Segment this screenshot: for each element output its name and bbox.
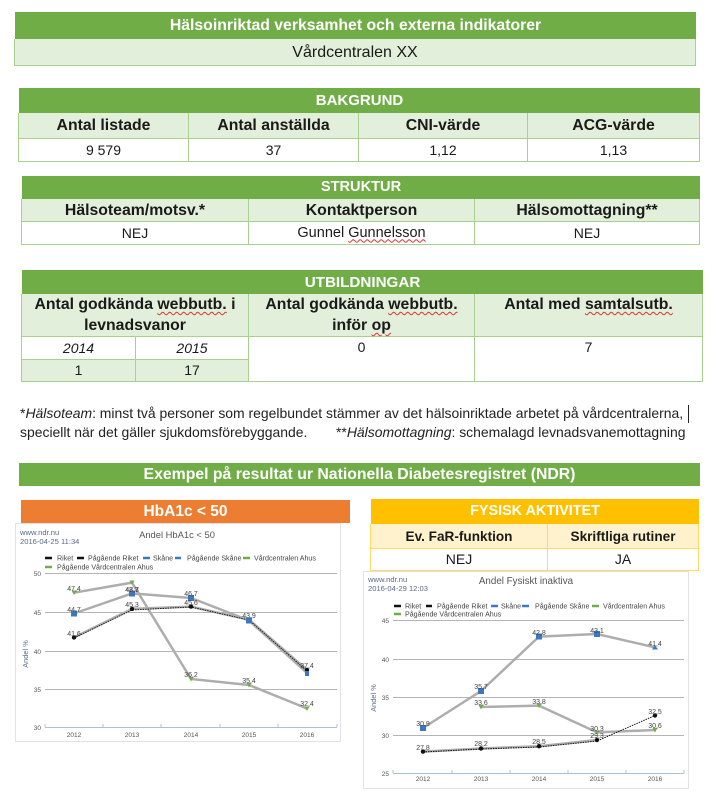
line chart: Andel HbA1c < 50: Vårdcentralen Ahus <box>254 554 316 562</box>
value: skriftliga rutiner <box>548 549 699 571</box>
line chart: Andel HbA1c < 50: 43,9 <box>242 613 256 620</box>
line chart: Andel Fysiskt inaktiva: 2012 <box>416 776 431 783</box>
heading: utbildningar <box>22 270 703 294</box>
line chart: Andel HbA1c < 50: Andel % <box>21 640 30 668</box>
heading: fysisk aktivitet <box>371 499 699 524</box>
line chart: Andel Fysiskt inaktiva: Vårdcentralen Ahus <box>603 602 665 610</box>
line chart: Andel Fysiskt inaktiva: Pågående Riket <box>437 602 488 610</box>
line chart: Andel HbA1c < 50: 2012 <box>67 732 82 739</box>
column header: kontaktperson <box>249 199 475 222</box>
column header: hälsomottagning: Hälsomottagning** <box>516 202 658 218</box>
value: hälsomottagning: NEJ <box>574 224 600 240</box>
value: ACG-värde <box>528 139 700 162</box>
value: hälsomottagning <box>475 222 700 245</box>
value: FaR-funktion <box>371 549 548 571</box>
line chart: Andel HbA1c < 50: 35 <box>34 687 41 694</box>
column header: ACG-värde <box>528 113 700 139</box>
line chart: Andel Fysiskt inaktiva: 45 <box>382 618 389 625</box>
panel: bakgrund <box>18 88 700 162</box>
heading: HbA1c: HbA1c < 50 <box>143 503 228 520</box>
line chart: Andel Fysiskt inaktiva: 30,9 <box>416 721 430 728</box>
column header: antal listade: Antal listade <box>57 117 150 134</box>
value: antal listade <box>19 139 189 162</box>
line chart: Andel Fysiskt inaktiva: 28,2 <box>474 741 488 748</box>
line chart: Andel HbA1c < 50: 50 <box>34 571 41 578</box>
value: skriftliga rutiner: JA <box>615 551 631 567</box>
column header: samtalsutb <box>475 294 703 337</box>
line chart: Andel HbA1c < 50: 30 <box>34 725 41 732</box>
line chart: Andel HbA1c < 50: Pågående Vårdcentralen Ahus <box>57 564 154 572</box>
line chart: Andel Fysiskt inaktiva: 2016 <box>648 776 663 783</box>
line chart: Andel Fysiskt inaktiva: 2016-04-29 12:03 <box>368 584 428 593</box>
line chart: Andel Fysiskt inaktiva: 40 <box>382 657 389 664</box>
section heading: NDR: Exempel på resultat ur Nationella Diabetesregistret (NDR) <box>144 466 575 483</box>
column header: samtalsutb: Antal med samtalsutb. <box>504 296 673 313</box>
value: hälsoteam <box>22 222 249 245</box>
value: kontaktperson: Gunnel Gunnelsson <box>297 224 426 240</box>
heading: struktur <box>22 176 700 199</box>
line chart: Andel HbA1c < 50: 48,7 <box>125 587 139 594</box>
value: webbutb inför op <box>249 337 475 382</box>
line chart: Andel HbA1c < 50: 2015 <box>242 732 257 739</box>
line chart: Andel Fysiskt inaktiva: Pågående Vårdcentralen Ahus <box>405 610 502 618</box>
value: antal anställda <box>189 139 359 162</box>
value: samtalsutb <box>475 337 703 382</box>
column header: skriftliga rutiner <box>548 524 699 549</box>
line chart: Andel HbA1c < 50: 2014 <box>184 732 199 739</box>
value: kontaktperson <box>249 222 475 245</box>
line chart: Andel HbA1c < 50: 2016-04-25 11:34 <box>20 537 79 546</box>
line chart: Andel Fysiskt inaktiva: 28,5 <box>532 739 546 746</box>
heading: fysisk aktivitet: FYSISK AKTIVITET <box>470 503 600 519</box>
line chart: Andel HbA1c < 50: 36,2 <box>184 672 198 679</box>
line chart: Andel Fysiskt inaktiva: 32,5 <box>648 709 662 716</box>
value: hälsoteam: NEJ <box>122 224 148 240</box>
column header: FaR-funktion <box>371 524 548 549</box>
line chart: Andel Fysiskt inaktiva: 35,7 <box>474 684 488 691</box>
line chart: Andel HbA1c < 50: 40 <box>34 649 41 656</box>
line chart: Andel HbA1c < 50: Pågående Riket <box>88 554 139 562</box>
line chart: Andel HbA1c < 50: 41,6 <box>67 631 81 638</box>
year: 2015: 2015 <box>176 340 208 356</box>
column header: antal listade <box>19 113 189 139</box>
column header: hälsoteam <box>22 199 249 222</box>
line chart: Andel HbA1c < 50: 47,3 <box>125 587 139 594</box>
line chart: Andel HbA1c < 50: 45,6 <box>184 600 198 607</box>
year: 2014 <box>22 337 136 360</box>
column header: skriftliga rutiner: Skriftliga rutiner <box>570 528 676 544</box>
line chart: Andel Fysiskt inaktiva: Andel Fysiskt inaktiva <box>479 576 574 587</box>
value: ACG-värde: 1,13 <box>600 142 627 158</box>
column header: webbutb inför op: Antal godkända webbutb. <box>265 296 458 313</box>
title bar <box>15 12 696 39</box>
line chart: Andel Fysiskt inaktiva: 33,6 <box>474 700 488 707</box>
column header: webbutb inför op <box>249 294 475 337</box>
line chart: Andel Fysiskt inaktiva: 30 <box>382 733 389 740</box>
value: CNI-värde: 1,12 <box>429 142 457 158</box>
heading: utbildningar: UTBILDNINGAR <box>305 274 420 290</box>
subtitle: health centre name: Vårdcentralen XX <box>292 44 418 60</box>
line chart: Andel HbA1c < 50: 46,7 <box>184 591 198 598</box>
footnotes: speciellt när det gäller sjukdomsförebyggande. <box>20 424 307 440</box>
line chart: Andel HbA1c < 50: 45,3 <box>125 602 139 609</box>
line chart: Andel HbA1c < 50: www.ndr.nu <box>19 528 59 537</box>
line chart: Andel HbA1c < 50: 2013 <box>125 732 140 739</box>
line chart: Andel Fysiskt inaktiva: 43,1 <box>590 628 604 635</box>
column header: webbutb inför op: inför op <box>332 317 391 334</box>
value: 2015 <box>136 360 249 382</box>
footnotes <box>20 405 685 440</box>
line chart: Andel Fysiskt inaktiva: Pågående Skåne <box>535 602 589 610</box>
line chart: Andel Fysiskt inaktiva: 33,8 <box>532 699 546 706</box>
panel: utbildningar <box>21 270 703 382</box>
value: CNI-värde <box>359 139 528 162</box>
line chart: Andel HbA1c < 50: Skåne <box>153 554 173 562</box>
value: antal anställda: 37 <box>266 142 281 158</box>
line chart: Andel Fysiskt inaktiva: Skåne <box>501 602 521 610</box>
column header: antal anställda <box>189 113 359 139</box>
column header: hälsomottagning <box>475 199 700 222</box>
column header: webbutb i levnadsvanor: levnadsvanor <box>84 317 186 334</box>
year: 2015 <box>136 337 249 360</box>
value: antal listade: 9 579 <box>86 142 121 158</box>
value: FaR-funktion: NEJ <box>446 551 472 567</box>
panel: struktur <box>21 176 700 245</box>
line chart: Andel HbA1c < 50: 47,4 <box>67 586 81 593</box>
line chart: Andel Fysiskt inaktiva: Riket <box>405 602 421 610</box>
line chart: Andel HbA1c < 50: 2016 <box>300 732 315 739</box>
line chart: Andel HbA1c < 50: Pågående Skåne <box>187 554 241 562</box>
line chart: Andel Fysiskt inaktiva: Andel % <box>369 684 378 712</box>
value: 2014 <box>22 360 136 382</box>
value: 2015: 17 <box>184 362 200 378</box>
column header: CNI-värde: CNI-värde <box>406 117 480 134</box>
value: 2014: 1 <box>75 362 82 378</box>
line chart: Andel HbA1c < 50: 35,4 <box>242 678 256 685</box>
line chart: Andel HbA1c < 50: 32,4 <box>300 701 314 708</box>
line chart: Andel Fysiskt inaktiva: 2013 <box>474 776 489 783</box>
line chart: Andel Fysiskt inaktiva: 25 <box>382 771 389 778</box>
line chart: Andel Fysiskt inaktiva: 27,8 <box>416 745 430 752</box>
line chart: Andel Fysiskt inaktiva: 42,8 <box>532 630 546 637</box>
line chart: Andel Fysiskt inaktiva: 2015 <box>590 776 605 783</box>
line chart: Andel Fysiskt inaktiva: 30,3 <box>590 726 604 733</box>
heading: HbA1c <box>21 500 350 523</box>
heading: bakgrund: BAKGRUND <box>316 92 403 109</box>
column header: FaR-funktion: Ev. FaR-funktion <box>406 528 512 544</box>
line chart: Andel Fysiskt inaktiva: www.ndr.nu <box>367 575 407 584</box>
year: 2014: 2014 <box>63 340 94 356</box>
line chart: Andel Fysiskt inaktiva: 41,4 <box>648 641 662 648</box>
line chart: Andel Fysiskt inaktiva <box>363 571 689 789</box>
line chart: Andel Fysiskt inaktiva: 2014 <box>532 776 547 783</box>
section heading: NDR <box>19 463 700 486</box>
line chart: Andel Fysiskt inaktiva: 35 <box>382 695 389 702</box>
value: samtalsutb: 7 <box>585 339 592 355</box>
subtitle: health centre name <box>15 39 696 66</box>
heading: bakgrund <box>19 88 700 113</box>
line chart: Andel Fysiskt inaktiva: 29,3 <box>590 733 604 740</box>
column header: webbutb i levnadsvanor <box>22 294 249 337</box>
footnotes: **Hälsomottagning: schemalagd levnadsvanemottagning <box>336 424 685 440</box>
line chart: Andel HbA1c < 50: Andel HbA1c < 50 <box>139 529 215 540</box>
column header: webbutb i levnadsvanor: Antal godkända webbutb. i <box>34 296 235 313</box>
line chart: Andel Fysiskt inaktiva: 30,6 <box>648 723 662 730</box>
column header: kontaktperson: Kontaktperson <box>306 202 417 218</box>
footnotes: *Hälsoteam: minst två personer som regelbundet stämmer av det hälsoinriktade arbetet på vårdcentralerna, <box>20 405 683 421</box>
line chart: Andel HbA1c < 50: Riket <box>57 554 73 562</box>
column header: antal anställda: Antal anställda <box>217 117 330 134</box>
line chart: Andel HbA1c < 50: 45 <box>34 610 41 617</box>
title bar: Hälsoinriktad verksamhet och externa indikatorer <box>170 17 541 34</box>
heading: struktur: STRUKTUR <box>321 179 401 195</box>
column header: CNI-värde <box>359 113 528 139</box>
line chart: Andel HbA1c < 50: 44,7 <box>67 607 81 614</box>
column header: hälsoteam: Hälsoteam/motsv.* <box>65 202 205 218</box>
value: webbutb inför op: 0 <box>358 339 365 355</box>
column header: ACG-värde: ACG-värde <box>572 117 655 134</box>
line chart: Andel HbA1c < 50 <box>15 523 341 742</box>
panel: fysisk aktivitet <box>370 499 699 571</box>
line chart: Andel HbA1c < 50: 37,4 <box>300 663 314 670</box>
